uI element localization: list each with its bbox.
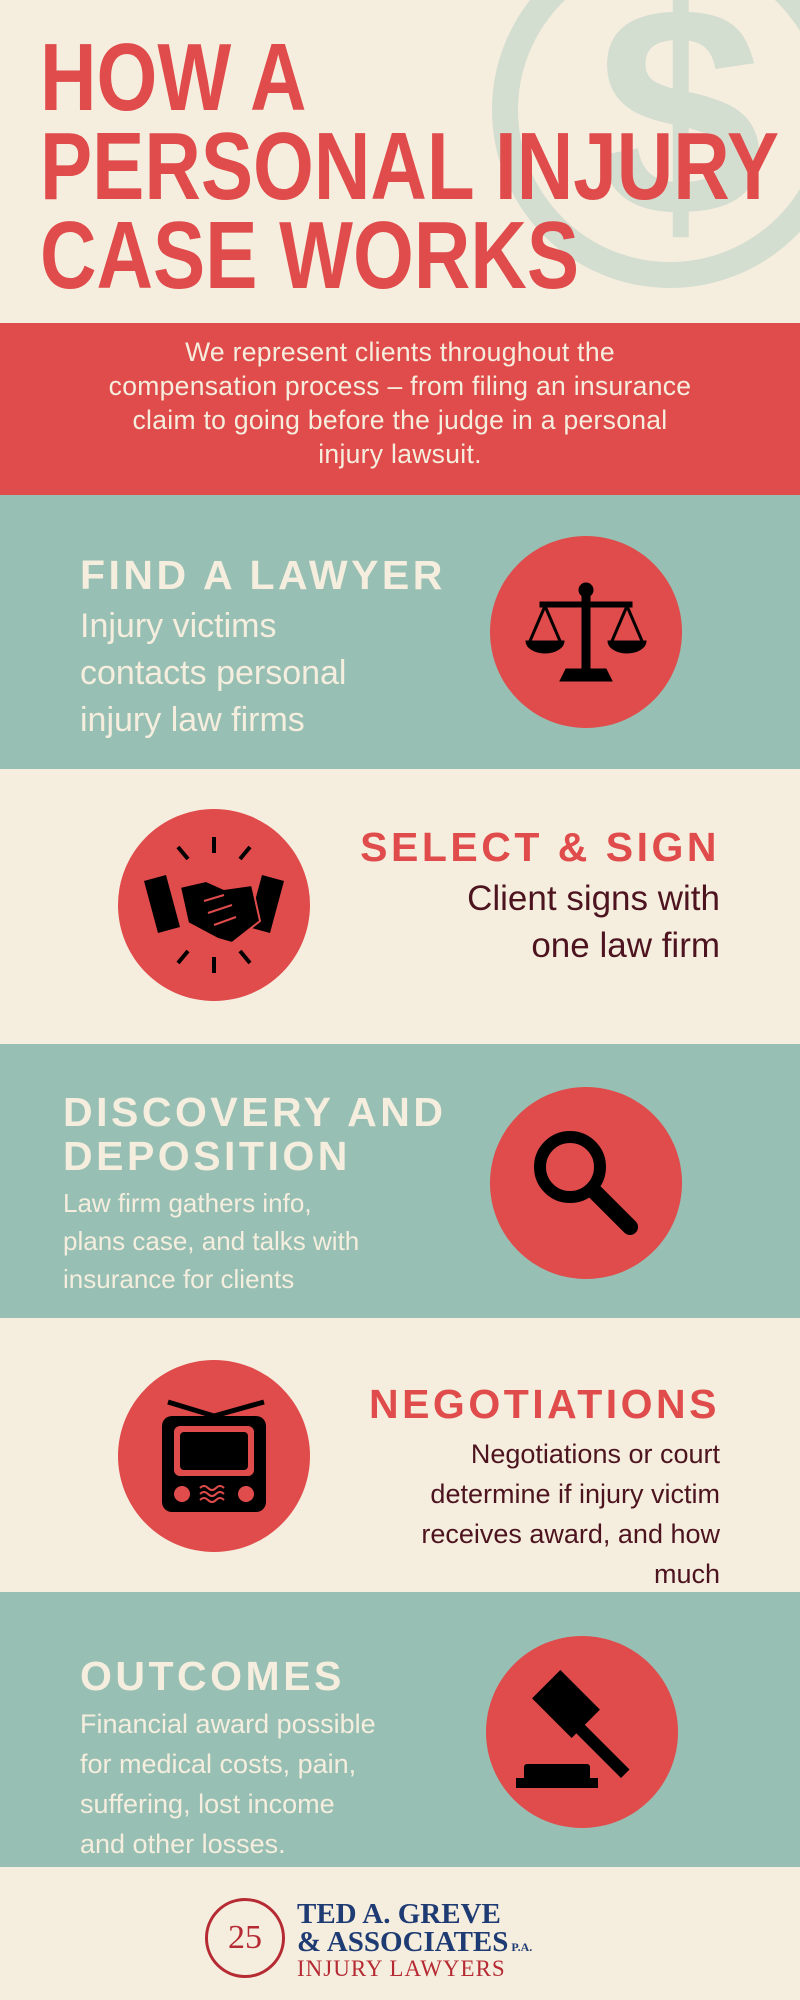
icon: handshake	[118, 809, 310, 1001]
heading: SELECT & SIGN	[360, 824, 720, 870]
panel: select and sign	[0, 769, 800, 1044]
footer logo	[205, 1898, 532, 1981]
text	[80, 1709, 376, 1859]
panel: negotiations	[0, 1318, 800, 1592]
text	[467, 879, 720, 965]
text: receives award, and how	[421, 1519, 720, 1549]
text	[421, 1439, 720, 1589]
firm name	[297, 1898, 532, 1958]
text: injury law firms	[80, 701, 305, 739]
title: HOW A	[40, 24, 307, 131]
footer logo: INJURY LAWYERS	[297, 1956, 506, 1981]
text: insurance for clients	[63, 1264, 294, 1294]
text: plans case, and talks with	[63, 1226, 359, 1256]
panel: find a lawyer	[0, 495, 800, 769]
icon: magnifier	[490, 1087, 682, 1279]
decorative dollar coin	[492, 0, 800, 288]
panel: outcomes	[0, 1592, 800, 1867]
text: suffering, lost income	[80, 1789, 335, 1819]
intro banner	[0, 323, 800, 495]
badge	[205, 1898, 285, 1978]
heading: DISCOVERY AND	[63, 1089, 446, 1135]
intro banner: We represent clients throughout the	[185, 337, 615, 367]
heading: FIND A LAWYER	[80, 552, 446, 598]
text: for medical costs, pain,	[80, 1749, 356, 1779]
text: Injury victims	[80, 607, 276, 645]
text: determine if injury victim	[430, 1479, 720, 1509]
firm name: TED A. GREVE	[297, 1898, 501, 1930]
intro banner: compensation process – from filing an insurance	[109, 371, 691, 401]
title	[40, 24, 779, 309]
text: Client signs with	[467, 879, 720, 918]
text: and other losses.	[80, 1829, 286, 1859]
heading	[63, 1089, 446, 1179]
title: CASE WORKS	[40, 202, 579, 309]
heading: OUTCOMES	[80, 1653, 345, 1699]
text: Law firm gathers info,	[63, 1188, 312, 1218]
intro banner: claim to going before the judge in a personal	[132, 405, 668, 435]
icon: tv	[118, 1360, 310, 1552]
title: PERSONAL INJURY	[40, 113, 779, 220]
intro banner: injury lawsuit.	[318, 439, 482, 469]
text: Financial award possible	[80, 1709, 376, 1739]
icon: scales	[490, 536, 682, 728]
badge: 25	[228, 1919, 262, 1956]
text: contacts personal	[80, 654, 346, 692]
text: Negotiations or court	[471, 1439, 720, 1469]
text: one law firm	[531, 926, 720, 965]
panel: discovery	[0, 1044, 800, 1318]
text	[63, 1188, 359, 1294]
heading: DEPOSITION	[63, 1133, 351, 1179]
firm name: & ASSOCIATES P.A.	[297, 1926, 532, 1958]
heading: NEGOTIATIONS	[369, 1381, 720, 1427]
icon: gavel	[486, 1636, 678, 1828]
text	[80, 607, 346, 739]
text: much	[654, 1559, 720, 1589]
